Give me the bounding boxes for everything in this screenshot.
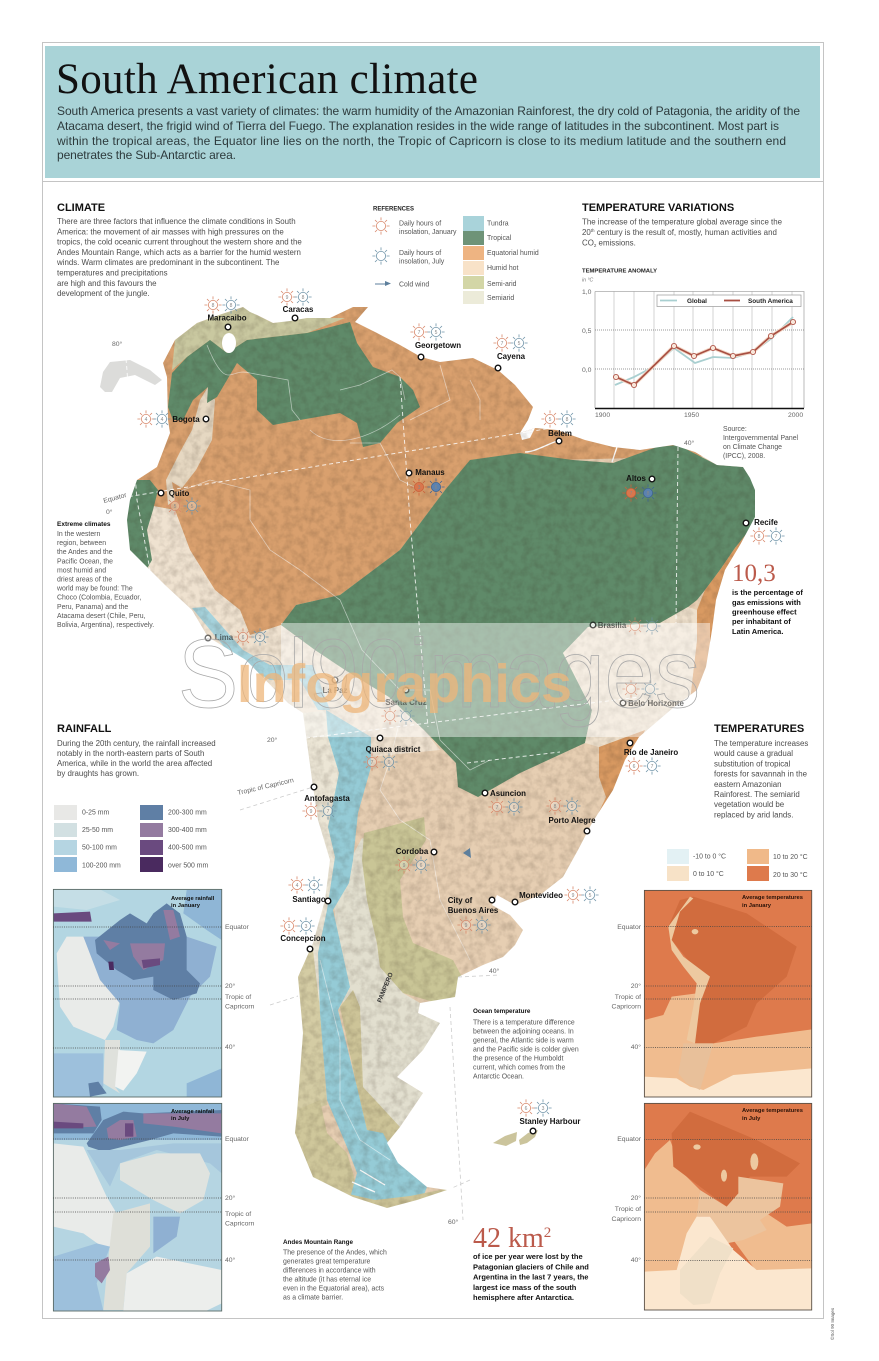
extreme climates text: Pacific Ocean, the: [57, 558, 113, 565]
chart legend: Global: [687, 298, 707, 305]
climate text block: CLIMATE: [57, 202, 105, 214]
map city markers and labels: Cordoba: [396, 847, 429, 856]
map city markers and labels: Antofagasta: [304, 794, 350, 803]
map city markers and labels: Asuncion: [490, 789, 526, 798]
insolation icons: 9: [388, 760, 391, 766]
temperature map: July: Average temperatures: [742, 1108, 803, 1114]
references legend: Daily hours of: [399, 220, 441, 228]
temperatures text: The temperature increases: [714, 739, 808, 748]
map city markers and labels: Caracas: [283, 305, 314, 314]
extreme climates text: region, between: [57, 540, 106, 547]
climate text block: temperatures and precipitations: [57, 268, 168, 278]
map city markers and labels: Santa Cruz: [385, 698, 427, 707]
callout: 42 km2: [473, 1223, 589, 1302]
icon: cold wind arrow: [375, 281, 391, 286]
Andes Mountain Range text: differences in accordance with: [283, 1268, 376, 1274]
ocean temperature text: current, which comes from the: [473, 1064, 565, 1072]
temperatures text: Rainforest. The semiarid: [714, 790, 800, 799]
references legend: REFERENCES: [373, 206, 414, 212]
callout: 10,3: is the percentage of: [732, 588, 803, 597]
temperature variations text: 20: [582, 228, 591, 237]
extreme climates text: the Andes and the: [57, 549, 113, 556]
climate text block: development of the jungle.: [57, 289, 150, 298]
callout: 42 km2: largest ice mass of the south: [473, 1283, 577, 1292]
temperature map: July: Equator: [617, 1136, 642, 1143]
temperature map: January: [612, 890, 812, 1097]
rainfall map: January: Capricorn: [225, 1004, 255, 1010]
insolation icons: 7: [327, 809, 330, 815]
insolation icons: 9: [286, 295, 289, 301]
map geographic labels: Tropic of Capricorn: [237, 777, 295, 797]
temperature map: July: 20°: [631, 1194, 641, 1202]
chart legend: [657, 295, 801, 306]
source note: on Climate Change: [723, 444, 782, 451]
ocean temperature text: There is a temperature difference: [473, 1020, 575, 1026]
ocean temperature text: between the adjoining oceans. In: [473, 1028, 574, 1036]
watermark: Infographics: [237, 654, 572, 714]
temperatures text: would cause a gradual: [713, 749, 793, 758]
insolation icons: 7: [501, 341, 504, 347]
climate swatches: Tundra: [487, 220, 509, 228]
extreme climates text: In the western: [57, 531, 100, 538]
insolation icons: 7: [418, 330, 421, 336]
rainfall legend: 100-200 mm: [82, 862, 121, 870]
temperature variations text: emissions.: [596, 238, 636, 248]
temperature map: July: Tropic of: [615, 1206, 641, 1213]
temperature anomaly chart: TEMPERATURE ANOMALY: [582, 268, 657, 274]
intro text: penetrates the Sub-Antarctic area.: [57, 148, 236, 162]
temperature map: January: Capricorn: [612, 1004, 641, 1010]
icon: July insolation: [372, 247, 390, 265]
insolation icons: 8: [230, 303, 233, 309]
callout: 10,3: [732, 560, 803, 636]
insolation icons: 5: [549, 417, 552, 423]
map geographic labels: 40°: [684, 439, 695, 447]
temperature variations text: [582, 202, 783, 248]
source note: Intergovernmental Panel: [723, 435, 799, 442]
watermark band: [281, 623, 710, 737]
insolation icons: 8: [647, 491, 650, 497]
temperatures text: eastern Amazonian: [714, 780, 782, 789]
map geographic labels: 40°: [489, 967, 500, 975]
rainfall map: July: Capricorn: [225, 1220, 255, 1228]
rainfall map: January: 20°: [225, 982, 236, 990]
ocean temperature text: Ocean temperature: [473, 1008, 531, 1015]
map city markers and labels: Quito: [169, 489, 189, 498]
ocean temperature text: the presence of the Humboldt: [473, 1056, 563, 1062]
map city markers and labels: Manaus: [415, 468, 445, 477]
map geographic labels: 60°: [448, 1218, 459, 1226]
rainfall legend: over 500 mm: [168, 862, 208, 870]
map city markers and labels: La Paz: [322, 686, 348, 695]
borders and rivers: [170, 345, 490, 1160]
temperature anomaly chart: 2000: [788, 412, 803, 419]
insolation icons: 7: [651, 764, 654, 770]
map city markers and labels: Belem: [548, 429, 572, 438]
map city markers and labels: Rio de Janeiro: [624, 748, 678, 757]
temperature legend: 20 to 30 °C: [773, 871, 808, 879]
map geographic labels: 80°: [112, 340, 123, 348]
temperature variations text: TEMPERATURE VARIATIONS: [582, 202, 734, 214]
temperature map: January: 20°: [631, 982, 641, 990]
temperature anomaly chart: in °C: [582, 278, 594, 284]
climate swatches: [463, 216, 539, 304]
map geographic labels: 0°: [106, 508, 113, 516]
insolation icons: 6: [513, 805, 516, 811]
rainfall legend: 400-500 mm: [168, 844, 207, 852]
insolation icons: 7: [496, 805, 499, 811]
extreme climates text: driest areas of the: [57, 576, 112, 584]
callout: 10,3: 10,3: [732, 560, 776, 587]
global series: [615, 317, 793, 385]
rainfall map: January: Equator: [225, 924, 250, 931]
ocean temperature text: and the Pacific side is colder given: [473, 1046, 579, 1054]
map city markers and labels: Montevideo: [519, 891, 563, 900]
map geographic labels: [103, 340, 695, 1226]
intro text: Atacama desert, the frigid wind of Tierra del Fuego. The explanation resides in the wide range of latitudes in the subcontinent. Most part is: [57, 119, 779, 133]
map city markers and labels: [158, 305, 778, 1134]
temperature anomaly chart: 1900: [595, 412, 610, 419]
temperatures text: forests for savannah in the: [714, 770, 808, 779]
climate swatches: Semi-arid: [487, 281, 517, 288]
insolation icons: 9: [572, 893, 575, 899]
temperatures text: vegetation would be: [714, 800, 785, 809]
insolation icons: 4: [296, 883, 299, 889]
extreme climates text: most humid and: [57, 567, 106, 574]
extreme climates text: Peru, Panama) and the: [57, 604, 128, 611]
extreme climates text: Bolivia, Argentina), respectively.: [57, 622, 154, 629]
source note: [723, 426, 799, 460]
intro text: within the tropical areas, the Equator line lies on the north, the Tropic of Capricorn is close to its medium latitude and the southern end: [56, 134, 786, 148]
Lake Maracaibo: [222, 333, 236, 353]
rainfall text: by draughts has grown.: [57, 769, 139, 778]
map city markers and labels: City of: [448, 896, 473, 905]
temperature map: July: in July: [742, 1116, 761, 1122]
ocean temperature text: Antarctic Ocean.: [473, 1074, 524, 1080]
rainfall map: January: Average rainfall: [171, 896, 215, 902]
rainfall legend: [54, 805, 208, 872]
climate text block: [56, 202, 302, 298]
insolation icons: 8: [566, 417, 569, 423]
source note: Source:: [723, 426, 747, 433]
insolation icons: 3: [542, 1106, 545, 1112]
temperature variations text: th: [591, 228, 595, 233]
rainfall map: July: 40°: [225, 1256, 236, 1264]
insolation icons: 5: [174, 504, 177, 510]
temperature anomaly chart: 1950: [684, 412, 699, 419]
references legend: Daily hours of: [399, 250, 441, 257]
callout: 42 km2: Patagonian glaciers of Chile and: [473, 1262, 589, 1272]
temperature map: January: in January: [742, 903, 772, 909]
callout: 42 km2: of ice per year were lost by the: [473, 1252, 583, 1261]
rainfall map: July: 20°: [225, 1194, 236, 1202]
map geographic labels: 20°: [267, 736, 278, 744]
map city markers and labels: Cayena: [497, 352, 526, 361]
map city markers and labels: Quiaca district: [366, 745, 421, 754]
climate text block: There are three factors that influence the climate conditions in South: [57, 217, 296, 226]
Panama land: [100, 360, 162, 392]
temperatures text: replaced by arid lands.: [714, 810, 793, 819]
climate swatches: Semiarid: [487, 295, 514, 302]
insolation icons: [137, 288, 785, 1117]
callout: 42 km2: Argentina in the last 7 years, the: [473, 1272, 588, 1282]
map city markers and labels: Santiago: [292, 895, 326, 904]
map city markers and labels: Bogota: [172, 415, 200, 424]
climate text block: tropics, the cold oceanic current throughout the western shore and the: [57, 238, 302, 247]
map city markers and labels: Belo Horizonte: [628, 699, 684, 708]
map city markers and labels: Concepcion: [280, 934, 326, 943]
ocean temperature text: [473, 1008, 579, 1080]
climate text block: Andes Mountain Range, which acts as a barrier for the humid western: [57, 248, 301, 257]
climate swatches: Equatorial humid: [487, 250, 539, 257]
references legend: Cold wind: [399, 282, 429, 288]
callout: 10,3: greenhouse effect: [732, 608, 797, 616]
map city markers and labels: Buenos Aires: [448, 906, 499, 915]
insolation icons: 8: [554, 804, 557, 810]
temperature legend: -10 to 0 °C: [693, 852, 726, 860]
temperature variations text: 2: [594, 243, 597, 248]
map geographic labels: PAMPERO: [376, 972, 395, 1004]
insolation icons: 4: [145, 417, 148, 423]
callout: 10,3: gas emissions with: [732, 598, 801, 607]
graticule lines: [108, 345, 678, 763]
insolation icons: 2: [259, 635, 262, 641]
temperature map: January: Equator: [617, 924, 642, 931]
temperature variations text: CO: [582, 238, 594, 248]
map city markers and labels: Stanley Harbour: [520, 1117, 580, 1126]
insolation icons: 7: [371, 760, 374, 766]
rainfall map: July: Tropic of: [225, 1211, 251, 1218]
insolation icons: 4: [161, 417, 164, 423]
map city markers and labels: Lima: [215, 633, 234, 642]
extreme climates text: world may be found: The: [56, 586, 133, 593]
temperature legend: 10 to 20 °C: [773, 853, 808, 861]
callout: 42 km2: 42 km: [473, 1223, 544, 1254]
temperature map: July: Capricorn: [612, 1216, 641, 1223]
references legend: [372, 206, 539, 304]
rainfall text: [57, 723, 216, 778]
rainfall map: January: [53, 889, 255, 1097]
climate text block: America: the movement of air masses with high pressures on the: [57, 227, 284, 236]
Andes Mountain Range text: the altitude (it has eternal ice: [283, 1276, 371, 1284]
insolation icons: 8: [302, 295, 305, 301]
temperature map: July: 40°: [631, 1256, 641, 1264]
temperature anomaly chart: 0,5: [582, 328, 592, 335]
insolation icons: 7: [630, 491, 633, 497]
map city markers and labels: Maracaibo: [207, 314, 247, 322]
temperatures text: TEMPERATURES: [714, 723, 804, 735]
main climate map: [100, 300, 770, 1220]
rainfall legend: 300-400 mm: [168, 827, 207, 834]
intro text: South America presents a vast variety of climates: the warm humidity of the Amazonian Rainforest, the dry cold of Patagonia, the aridity of the: [57, 104, 800, 118]
rainfall map: July: [53, 1103, 255, 1311]
temperatures text: substitution of tropical: [714, 759, 791, 768]
title: South American climate: [56, 56, 478, 103]
ocean temperature text: general, the Atlantic side is warm: [473, 1038, 574, 1044]
temperature map: July: [612, 1103, 812, 1310]
insolation icons: 6: [435, 485, 438, 491]
insolation icons: 6: [633, 764, 636, 770]
insolation icons: 7: [775, 534, 778, 540]
temperatures text: [713, 723, 808, 819]
map city markers and labels: Brasilia: [598, 621, 627, 630]
map city markers and labels: Porto Alegre: [548, 816, 596, 825]
rainfall legend: 0-25 mm: [82, 810, 109, 816]
insolation icons: 6: [420, 863, 423, 869]
insolation icons: 3: [305, 924, 308, 930]
insolation icons: 3: [418, 485, 421, 491]
temperature anomaly chart: [582, 268, 804, 419]
map city markers and labels: Recife: [754, 518, 778, 527]
South America series: [613, 319, 796, 388]
insolation icons: 6: [525, 1106, 528, 1112]
temperature map: January: 40°: [631, 1043, 641, 1051]
insolation icons: 1: [288, 924, 291, 930]
references legend: insolation, January: [399, 229, 457, 236]
Andes Mountain Range text: The presence of the Andes, which: [283, 1250, 387, 1256]
temperature variations text: century is the result of, mostly, human activities and: [595, 228, 777, 237]
rainfall map: January: Tropic of: [225, 994, 251, 1001]
extreme climates text: Extreme climates: [57, 521, 111, 528]
temperature legend: 0 to 10 °C: [693, 870, 724, 878]
map geographic labels: Equator: [103, 492, 128, 505]
Andes Mountain Range text: Andes Mountain Range: [283, 1239, 353, 1246]
extreme climates text: Choco (Colombia, Ecuador,: [57, 595, 141, 602]
insolation icons: 5: [571, 804, 574, 810]
rainfall legend: 50-100 mm: [82, 844, 117, 852]
rainfall map: July: Equator: [225, 1136, 250, 1143]
callout: 42 km2: hemisphere after Antarctica.: [473, 1293, 574, 1302]
insolation icons: 9: [310, 809, 313, 815]
intro text: [56, 104, 800, 162]
rainfall text: America, while in the world the area affected: [57, 759, 212, 768]
temperature variations text: The increase of the temperature global average since the: [582, 218, 783, 226]
Andes Mountain Range text: as a climate barrier.: [283, 1294, 343, 1302]
rainfall text: RAINFALL: [57, 723, 112, 735]
Andes Mountain Range text: [283, 1239, 387, 1302]
references legend: insolation, July: [399, 258, 445, 266]
climate swatches: Humid hot: [487, 265, 518, 272]
insolation icons: 4: [313, 883, 316, 889]
insolation icons: 9: [465, 923, 468, 929]
insolation icons: 5: [589, 893, 592, 899]
map city markers and labels: Georgetown: [415, 341, 461, 350]
insolation icons: 5: [518, 341, 521, 347]
insolation icons: 6: [242, 635, 245, 641]
rainfall legend: 200-300 mm: [168, 810, 207, 816]
insolation icons: 5: [435, 330, 438, 336]
rainfall legend: 25-50 mm: [82, 827, 113, 834]
map city markers and labels: Altos: [626, 474, 646, 483]
temperature map: January: Tropic of: [615, 994, 641, 1001]
rainfall map: July: in July: [171, 1116, 190, 1122]
temperature legend: [667, 849, 808, 881]
rainfall map: July: Average rainfall: [171, 1109, 215, 1115]
climate text block: winds. Warm climates are predominant in the subcontinent. The: [56, 258, 280, 267]
callout: 10,3: Latin America.: [732, 627, 783, 636]
insolation icons: 5: [191, 504, 194, 510]
insolation icons: 5: [481, 923, 484, 929]
source note: (IPCC), 2008.: [723, 453, 765, 460]
insolation icons: 8: [758, 534, 761, 540]
falkland islands: [493, 1130, 538, 1146]
rainfall map: January: 40°: [225, 1043, 236, 1051]
rainfall text: notably in the north-eastern parts of South: [57, 749, 204, 758]
temperature anomaly chart: 1,0: [582, 289, 592, 296]
icon: January insolation: [372, 217, 390, 235]
climate text block: are high and this favours the: [57, 279, 157, 288]
callout: 10,3: per inhabitant of: [732, 617, 791, 626]
chart legend: South America: [748, 298, 793, 305]
callout: 42 km2: 2: [544, 1225, 551, 1241]
temperature anomaly chart: 0,0: [582, 367, 592, 374]
credit: ©Sol 90 Images: [829, 1307, 835, 1340]
rainfall text: During the 20th century, the rainfall increased: [57, 739, 216, 748]
icon: cold wind arrow on map: [463, 848, 471, 858]
insolation icons: 9: [403, 863, 406, 869]
watermark: Sol90images: [178, 619, 700, 728]
Andes Mountain Range text: generates great temperature: [283, 1258, 371, 1266]
Andes Mountain Range text: even in the Equatorial area), acts: [283, 1286, 385, 1292]
insolation icons: 8: [212, 303, 215, 309]
temperature map: January: Average temperatures: [742, 895, 803, 901]
extreme climates text: [56, 521, 154, 629]
climate swatches: Tropical: [487, 235, 512, 242]
header panel: [45, 46, 820, 178]
extreme climates text: Atacama desert (Chile, Peru,: [57, 613, 146, 620]
rainfall map: January: in January: [171, 903, 201, 909]
